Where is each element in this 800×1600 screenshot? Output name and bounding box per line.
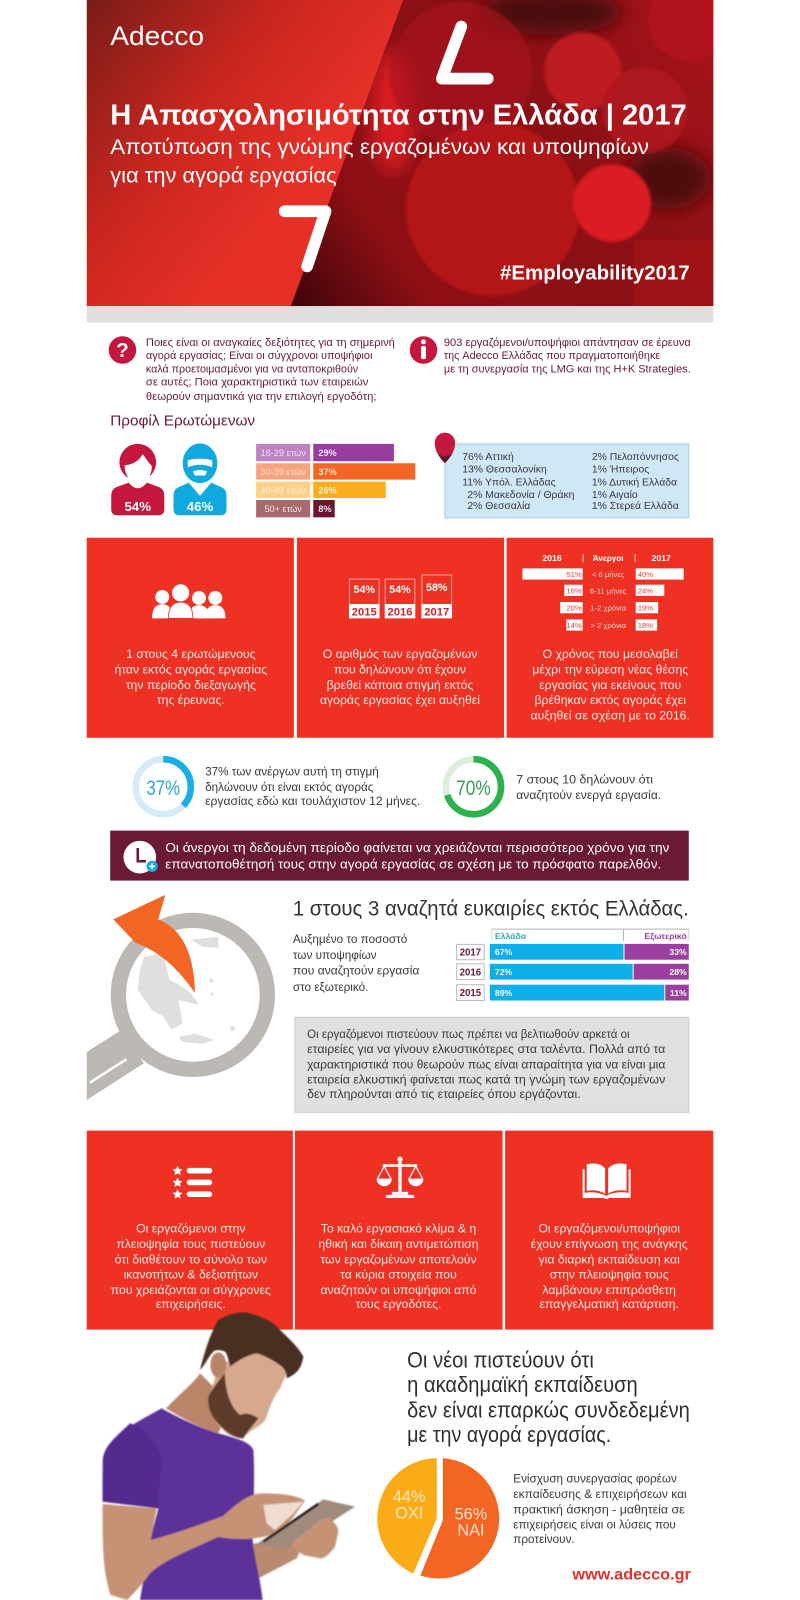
panel text: Ο αριθμός των εργαζομένων bbox=[323, 647, 477, 661]
panel text bbox=[318, 1222, 479, 1311]
region list: 2% Πελοπόννησος bbox=[592, 451, 679, 463]
info text: της Adecco Ελλάδας που πραγματοποιήθηκε bbox=[444, 350, 660, 362]
panel text: που δηλώνουν ότι έχουν bbox=[334, 662, 466, 676]
row 40-49: 26% bbox=[318, 485, 337, 495]
panel text: που χρειάζονται οι σύγχρονες bbox=[111, 1283, 271, 1297]
stat text 37%: δηλώνουν ότι είναι εκτός αγοράς bbox=[205, 781, 374, 794]
callout text: επανατοποθέτησή τους στην αγορά εργασίας σε σχέση με το πρόσφατο παρελθόν. bbox=[165, 856, 661, 871]
pie chart: ΟΧΙ bbox=[395, 1504, 423, 1522]
heading: youth education bbox=[407, 1347, 690, 1447]
pie chart: 44% bbox=[393, 1488, 426, 1506]
callout text: Οι άνεργοι τη δεδομένη περίοδο φαίνεται να χρειάζονται περισσότερο χρόνο για την bbox=[165, 840, 670, 855]
panel text: αναζητούν οι υποψήφιοι από bbox=[320, 1283, 477, 1297]
panel: unemployment duration bbox=[507, 538, 713, 738]
icon: question mark: ? bbox=[116, 340, 129, 362]
donut stat 70% bbox=[446, 759, 501, 814]
solutions text: προτείνουν. bbox=[513, 1533, 575, 1546]
stat text 37%: 37% των ανέργων αυτή τη στιγμή bbox=[205, 766, 379, 779]
row 2016 bbox=[457, 964, 689, 980]
stat text 37%: εργασίας εδώ και τουλάχιστον 12 μήνες. bbox=[205, 795, 420, 808]
butterfly chart: 18% bbox=[638, 621, 653, 630]
row 2017: 33% bbox=[669, 947, 687, 957]
row 50+: 50+ ετών bbox=[264, 504, 302, 514]
gray text box bbox=[295, 1017, 689, 1112]
clock hand: L bbox=[442, 27, 488, 79]
donut stat 70%: 70% bbox=[456, 776, 491, 800]
solutions text: επιχειρήσεις είναι οι λύσεις που bbox=[513, 1519, 676, 1532]
website url: www.adecco.gr bbox=[571, 1567, 691, 1584]
subtitle: Αποτύπωση της γνώμης εργαζομένων και υποψηφίων bbox=[110, 135, 649, 159]
row 30-39: 30-39 ετών bbox=[260, 467, 306, 477]
magnifier with Greece map bbox=[87, 895, 267, 1100]
heading: youth education: Οι νέοι πιστεύουν ότι bbox=[407, 1347, 594, 1372]
row 2017: 67% bbox=[495, 947, 513, 957]
icon: question mark bbox=[109, 336, 136, 364]
year boxes: 2015 bbox=[352, 606, 377, 618]
panel text: επαγγελματική κατάρτιση. bbox=[539, 1297, 679, 1311]
stacked bar chart: Εξωτερικό bbox=[644, 931, 687, 941]
stat text 70%: αναζητούν ενεργά εργασία. bbox=[516, 789, 661, 802]
icon: open book bbox=[583, 1163, 631, 1199]
donut stat 37%: 37% bbox=[146, 776, 180, 800]
butterfly chart: 2017 bbox=[652, 553, 671, 563]
panel text: βρεθεί κάποια στιγμή εκτός bbox=[327, 678, 473, 692]
icon: people bbox=[152, 584, 226, 618]
stacked bar chart: Ελλάδα bbox=[495, 931, 527, 941]
region list: 1% Ήπειρος bbox=[592, 464, 649, 475]
gray text box: χαρακτηριστικά που θεωρούν πως είναι απαραίτητα για να είναι μια bbox=[307, 1058, 666, 1071]
panel text: ηθική και δίκαιη αντιμετώπιση bbox=[318, 1237, 479, 1251]
butterfly chart: 51% bbox=[566, 570, 582, 579]
panel text: την περίοδο διεξαγωγής bbox=[126, 678, 256, 692]
solutions text: πρακτική άσκηση - μαθητεία σε bbox=[513, 1503, 685, 1516]
panel text bbox=[320, 647, 480, 707]
question text: καλά προετοιμασμένοι για να ανταποκριθούν bbox=[146, 363, 359, 375]
panel text: επιχειρήσεις. bbox=[156, 1297, 226, 1311]
donut stat 37% bbox=[136, 759, 191, 814]
panel text: μέχρι την εύρεση νέας θέσης bbox=[532, 662, 688, 676]
row 2016: 2016 bbox=[460, 968, 482, 979]
row 50+ bbox=[256, 500, 335, 517]
region list: 1% Δυτική Ελλάδα bbox=[592, 477, 677, 489]
panel text: της έρευνας. bbox=[157, 693, 225, 707]
butterfly chart: 20% bbox=[566, 604, 582, 613]
heading: youth education: η ακαδημαϊκή εκπαίδευση bbox=[407, 1372, 638, 1397]
question text bbox=[146, 337, 395, 403]
regions panel bbox=[435, 433, 689, 518]
panel text: Ο χρόνος που μεσολαβεί bbox=[543, 647, 678, 661]
icon: woman 54% bbox=[111, 444, 164, 515]
icon: scales bbox=[377, 1157, 423, 1198]
row 30-39 bbox=[256, 463, 415, 480]
heading: youth education: με την αγορά εργασίας. bbox=[407, 1422, 611, 1447]
question text: θεωρούν σημαντικά για την επιλογή εργοδότη; bbox=[146, 391, 377, 403]
butterfly chart bbox=[522, 553, 684, 631]
butterfly chart: 16% bbox=[566, 586, 582, 595]
region list: 2% Μακεδονία / Θράκη bbox=[467, 489, 575, 501]
panel text: βρέθηκαν εκτός αγοράς έχει bbox=[534, 693, 686, 707]
gray text box: Οι εργαζόμενοι πιστεύουν πως πρέπει να βελτιωθούν αρκετά οι bbox=[307, 1028, 630, 1041]
subtitle: για την αγορά εργασίας bbox=[110, 164, 337, 188]
abroad text: των υποψηφίων bbox=[293, 949, 377, 962]
panel text: αγοράς εργασίας έχει αυξηθεί bbox=[320, 693, 480, 707]
panel text: αυξηθεί σε σχέση με το 2016. bbox=[531, 708, 690, 722]
icon: star list bbox=[173, 1166, 212, 1198]
panel: 1 in 4 out of labour market bbox=[87, 538, 294, 738]
panel text: για διαρκή εκπαίδευση και bbox=[539, 1252, 680, 1266]
age bar chart bbox=[256, 444, 415, 517]
panel text: τους εργοδότες. bbox=[356, 1297, 441, 1311]
year boxes: 58% bbox=[426, 582, 448, 594]
panel text: Οι εργαζόμενοι/υποψήφιοι bbox=[538, 1222, 680, 1236]
butterfly chart: 40% bbox=[638, 570, 653, 579]
panel text: ικανοτήτων & δεξιοτήτων bbox=[124, 1268, 258, 1282]
year boxes: 54% bbox=[354, 584, 375, 596]
panel text bbox=[111, 1222, 271, 1311]
row 2015 bbox=[457, 985, 689, 1001]
butterfly chart: 2016 bbox=[542, 553, 562, 563]
stacked bar chart bbox=[457, 929, 689, 1001]
survey info block bbox=[410, 336, 691, 375]
region list: 1% Αιγαίο bbox=[592, 489, 638, 501]
butterfly chart: Άνεργοι bbox=[593, 554, 624, 563]
icon: clock plus bbox=[123, 841, 158, 873]
abroad text: που αναζητούν εργασία bbox=[293, 964, 420, 977]
gray text box: εταιρεία ελκυστική φαίνεται πως κατά τη γνώμη των εργαζομένων bbox=[307, 1074, 665, 1087]
info text: 903 εργαζόμενοι/υποψήφιοι απάντησαν σε έρευνα bbox=[444, 337, 691, 349]
arrow bbox=[113, 895, 195, 993]
pie chart bbox=[377, 1458, 499, 1578]
year boxes bbox=[349, 575, 452, 618]
panel text: 1 στους 4 ερωτώμενους bbox=[126, 647, 256, 661]
row 40-49 bbox=[256, 482, 386, 498]
row 2015: 2015 bbox=[460, 988, 482, 999]
row 2015: 11% bbox=[670, 988, 687, 998]
man with tablet illustration bbox=[103, 1312, 355, 1600]
question text: αγορά εργασίας; Είναι οι σύγχρονοι υποψήφιοι bbox=[146, 350, 373, 362]
abroad text bbox=[293, 933, 420, 994]
stat text 70% bbox=[516, 774, 661, 802]
region list: 13% Θεσσαλονίκη bbox=[462, 463, 547, 475]
pie chart: 56% bbox=[455, 1505, 487, 1523]
panel text: ήταν εκτός αγοράς εργασίας bbox=[114, 662, 267, 676]
row 30-39: 37% bbox=[318, 467, 337, 477]
panel text: στην πλειοψηφία τους bbox=[550, 1268, 669, 1282]
heading: 1 in 3 abroad: 1 στους 3 αναζητά ευκαιρίες εκτός Ελλάδας. bbox=[293, 896, 689, 920]
Greece map bbox=[138, 937, 235, 1044]
row 50+: 8% bbox=[318, 504, 332, 514]
solutions text: Ενίσχυση συνεργασίας φορέων bbox=[513, 1473, 677, 1486]
icon: map pin bbox=[435, 433, 455, 463]
row 2015: 89% bbox=[495, 988, 513, 998]
solutions text bbox=[513, 1473, 687, 1546]
question text: Ποιες είναι οι αναγκαίες δεξιότητες για τη σημερινή bbox=[146, 337, 395, 349]
panel text bbox=[531, 1222, 688, 1311]
butterfly chart: 24% bbox=[638, 586, 653, 595]
panel text: έχουν επίγνωση της ανάγκης bbox=[531, 1237, 688, 1251]
panel: skills bbox=[87, 1131, 293, 1330]
panel text: λαμβάνουν επιπρόσθετη bbox=[542, 1283, 676, 1297]
hashtag: #Employability2017 bbox=[500, 263, 690, 285]
panel: employees out of market by year bbox=[297, 538, 504, 738]
abroad text: Αυξημένο το ποσοστό bbox=[293, 933, 408, 946]
icon: woman 54%: 54% bbox=[124, 499, 151, 514]
panel: work climate bbox=[295, 1131, 503, 1330]
icon: man 46% bbox=[173, 443, 227, 515]
stat text 70%: 7 στους 10 δηλώνουν ότι bbox=[516, 774, 653, 787]
abroad text: στο εξωτερικό. bbox=[293, 981, 368, 994]
row 2017 bbox=[457, 944, 689, 960]
butterfly chart: 19% bbox=[638, 604, 653, 613]
gray band bbox=[87, 306, 713, 322]
heading: youth education: δεν είναι επαρκώς συνδεδεμένη bbox=[407, 1397, 690, 1422]
year boxes: 54% bbox=[389, 584, 411, 596]
region list bbox=[462, 451, 679, 512]
Adecco logo: Adecco bbox=[110, 21, 204, 51]
panel text: Οι εργαζόμενοι στην bbox=[136, 1222, 246, 1236]
panel text: εργασίας για εκείνους που bbox=[539, 678, 681, 692]
region list: 2% Θεσσαλία bbox=[467, 500, 530, 512]
question text: σε αυτές; Ποια χαρακτηριστικά των εταιρειών bbox=[146, 377, 369, 389]
solutions text: εκπαίδευσης & επιχειρήσεων και bbox=[513, 1488, 687, 1501]
panel text bbox=[531, 647, 690, 722]
butterfly chart: 6-11 μήνες bbox=[590, 586, 627, 595]
info text: με τη συνεργασία της LMG και της H+K Strategies. bbox=[444, 363, 691, 375]
pie chart: ΝΑΙ bbox=[457, 1522, 485, 1540]
main title: Η Απασχολησιμότητα στην Ελλάδα | 2017 bbox=[110, 99, 687, 131]
row 18-29: 18-29 ετών bbox=[260, 448, 306, 458]
callout band bbox=[110, 831, 689, 881]
hero banner bbox=[87, 0, 730, 306]
subtitle bbox=[110, 135, 649, 188]
gray text box: εταιρείες για να γίνουν ελκυστικότερες στα ταλέντα. Πολλά από τα bbox=[307, 1043, 666, 1056]
region list: 11% Υπόλ. Ελλάδας bbox=[462, 477, 556, 489]
panel text bbox=[114, 647, 267, 707]
panel: continuous training bbox=[505, 1131, 713, 1330]
row 2016: 72% bbox=[495, 967, 513, 977]
gray text box: δεν πληρούνται από τις εταιρείες όπου εργάζονται. bbox=[307, 1088, 581, 1101]
row 18-29: 29% bbox=[318, 448, 337, 458]
panel text: πλειοψηφία τους πιστεύουν bbox=[116, 1237, 265, 1251]
info text bbox=[444, 337, 691, 375]
stat text 37% bbox=[205, 766, 420, 808]
row 2017: 2017 bbox=[460, 948, 481, 959]
year boxes: 2016 bbox=[388, 606, 412, 618]
butterfly chart: > 2 χρόνια bbox=[590, 621, 626, 630]
callout text bbox=[165, 840, 670, 871]
row 18-29 bbox=[256, 444, 394, 461]
row 2016: 28% bbox=[669, 967, 687, 977]
year boxes: 2017 bbox=[424, 606, 449, 618]
heading: respondent profile: Προφίλ Ερωτώμενων bbox=[110, 414, 255, 430]
clock hand: 7 bbox=[285, 211, 326, 266]
question block bbox=[109, 336, 395, 403]
panel text: των εργαζομένων αποτελούν bbox=[320, 1252, 477, 1266]
row 40-49: 40-49 ετών bbox=[260, 485, 306, 495]
panel text: τα κύρια στοιχεία που bbox=[340, 1268, 457, 1282]
icon: man 46%: 46% bbox=[187, 499, 213, 514]
panel text: Το καλό εργασιακό κλίμα & η bbox=[321, 1222, 476, 1236]
butterfly chart: < 6 μήνες bbox=[592, 570, 625, 579]
region list: 1% Στερεά Ελλάδα bbox=[592, 500, 679, 512]
panel text: ότι διαθέτουν το σύνολο των bbox=[115, 1252, 267, 1266]
butterfly chart: 1-2 χρόνια bbox=[590, 604, 627, 613]
icon: info bbox=[410, 336, 437, 364]
butterfly chart: 14% bbox=[566, 621, 582, 630]
region list: 76% Αττική bbox=[462, 451, 514, 463]
